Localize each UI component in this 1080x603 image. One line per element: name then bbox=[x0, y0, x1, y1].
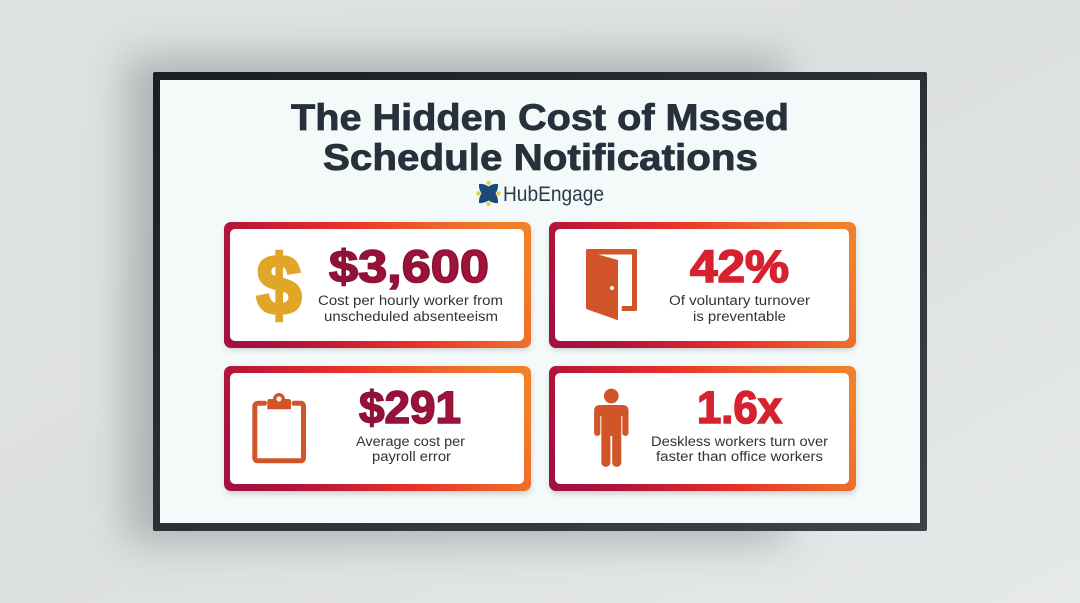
icon: dollar sign: $ bbox=[256, 238, 302, 332]
stat: $3,600: $3,600 bbox=[329, 241, 489, 292]
stat: 1.6x: 1.6x bbox=[697, 382, 782, 433]
stat: 42%: 42% bbox=[690, 241, 789, 292]
description: is preventable bbox=[693, 309, 786, 325]
logo wordmark: HubEngage bbox=[503, 183, 604, 206]
description bbox=[669, 293, 810, 325]
description: Of voluntary turnover bbox=[669, 293, 810, 309]
display frame bbox=[153, 72, 927, 531]
stat: $291: $291 bbox=[359, 382, 461, 433]
icon: clipboard bbox=[255, 393, 304, 461]
HubEngage logo bbox=[476, 181, 604, 206]
description: payroll error bbox=[372, 449, 451, 465]
icon: person bbox=[594, 389, 628, 467]
title: The Hidden Cost of Mssed bbox=[291, 96, 789, 138]
description bbox=[356, 434, 465, 465]
panel: payroll error bbox=[224, 366, 531, 494]
description: Cost per hourly worker from bbox=[318, 293, 503, 309]
title: Schedule Notifications bbox=[323, 136, 758, 178]
panel: absenteeism cost bbox=[224, 222, 531, 350]
description bbox=[318, 293, 503, 325]
wall shadow behind the screen bbox=[126, 56, 786, 542]
title bbox=[291, 96, 789, 178]
description: Average cost per bbox=[356, 434, 465, 450]
description: Deskless workers turn over bbox=[651, 434, 828, 450]
panel: voluntary turnover bbox=[549, 222, 856, 350]
screen panel bbox=[160, 80, 920, 523]
description: faster than office workers bbox=[656, 449, 823, 465]
description bbox=[651, 434, 828, 465]
icon: open door bbox=[586, 249, 637, 320]
panel: deskless workers bbox=[549, 366, 856, 494]
icon: logo mark bbox=[476, 181, 501, 206]
description: unscheduled absenteeism bbox=[324, 309, 498, 325]
